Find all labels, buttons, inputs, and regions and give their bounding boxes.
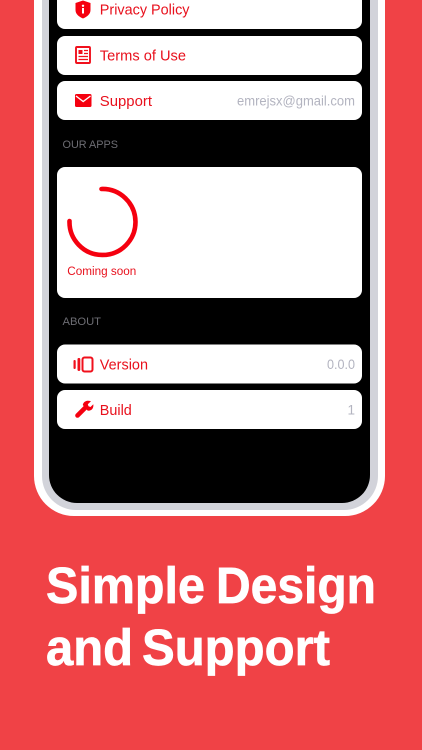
card: our apps	[57, 167, 362, 298]
title: Simple	[46, 557, 205, 614]
row: privacy policy	[57, 0, 362, 29]
phone mockup	[34, 0, 385, 516]
phone black screen	[49, 0, 370, 503]
label: coming soon: Coming soon	[67, 266, 136, 278]
label: version: Version	[100, 356, 148, 374]
label: privacy policy: Privacy Policy	[100, 2, 190, 18]
icon: wrench	[78, 401, 93, 416]
icon: loading spinner	[69, 189, 135, 255]
label: support: Support	[100, 93, 153, 110]
icon: vibrating phone	[74, 358, 92, 372]
row: version	[57, 344, 362, 384]
title: Support	[142, 619, 330, 676]
row: build	[57, 390, 362, 429]
title: Design	[216, 557, 376, 614]
phone grey bezel	[42, 0, 378, 510]
label: terms of use: Terms of Use	[100, 48, 186, 64]
heading: about: ABOUT	[62, 316, 101, 328]
row: terms of use	[57, 36, 362, 75]
row: support	[57, 81, 362, 120]
icon: envelope	[75, 94, 92, 107]
value: email: emrejsx@gmail.com	[237, 94, 355, 108]
title	[46, 557, 376, 676]
label: build: Build	[100, 402, 132, 419]
phone outer white frame	[34, 0, 385, 516]
title: and	[46, 619, 133, 676]
heading: our apps: OUR APPS	[62, 139, 118, 151]
value: build number: 1	[347, 402, 355, 418]
icon: shield	[76, 0, 90, 18]
value: version number: 0.0.0	[327, 357, 355, 372]
icon: document	[76, 47, 90, 63]
